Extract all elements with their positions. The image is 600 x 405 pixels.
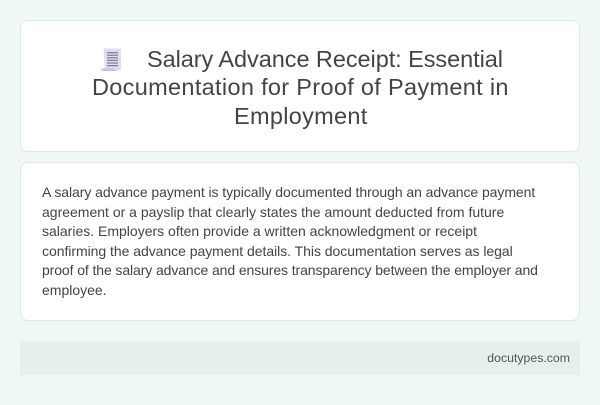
panel: title card (20, 20, 580, 152)
text: source: docutypes.com (487, 351, 570, 365)
text block: description: salaries. Employers often provide a written acknowledgment or receipt (42, 223, 477, 239)
title: Documentation for Proof of Payment in (92, 74, 509, 100)
icon: receipt (101, 48, 121, 71)
text block: description: proof of the salary advance and ensures transparency between the employer and (42, 262, 538, 278)
text block: description: A salary advance payment is typically documented through an advance payment (42, 184, 535, 200)
text block: description: employee. (42, 282, 107, 298)
title: Employment (234, 103, 368, 129)
text block: description (42, 184, 538, 298)
panel: footer (20, 341, 580, 375)
panel: description card (20, 162, 580, 321)
title (92, 46, 509, 129)
title: Salary Advance Receipt: Essential (147, 46, 503, 72)
text block: description: confirming the advance payment details. This documentation serves as legal (42, 242, 513, 258)
text block: description: agreement or a payslip that clearly states the amount deducted from future (42, 204, 504, 220)
